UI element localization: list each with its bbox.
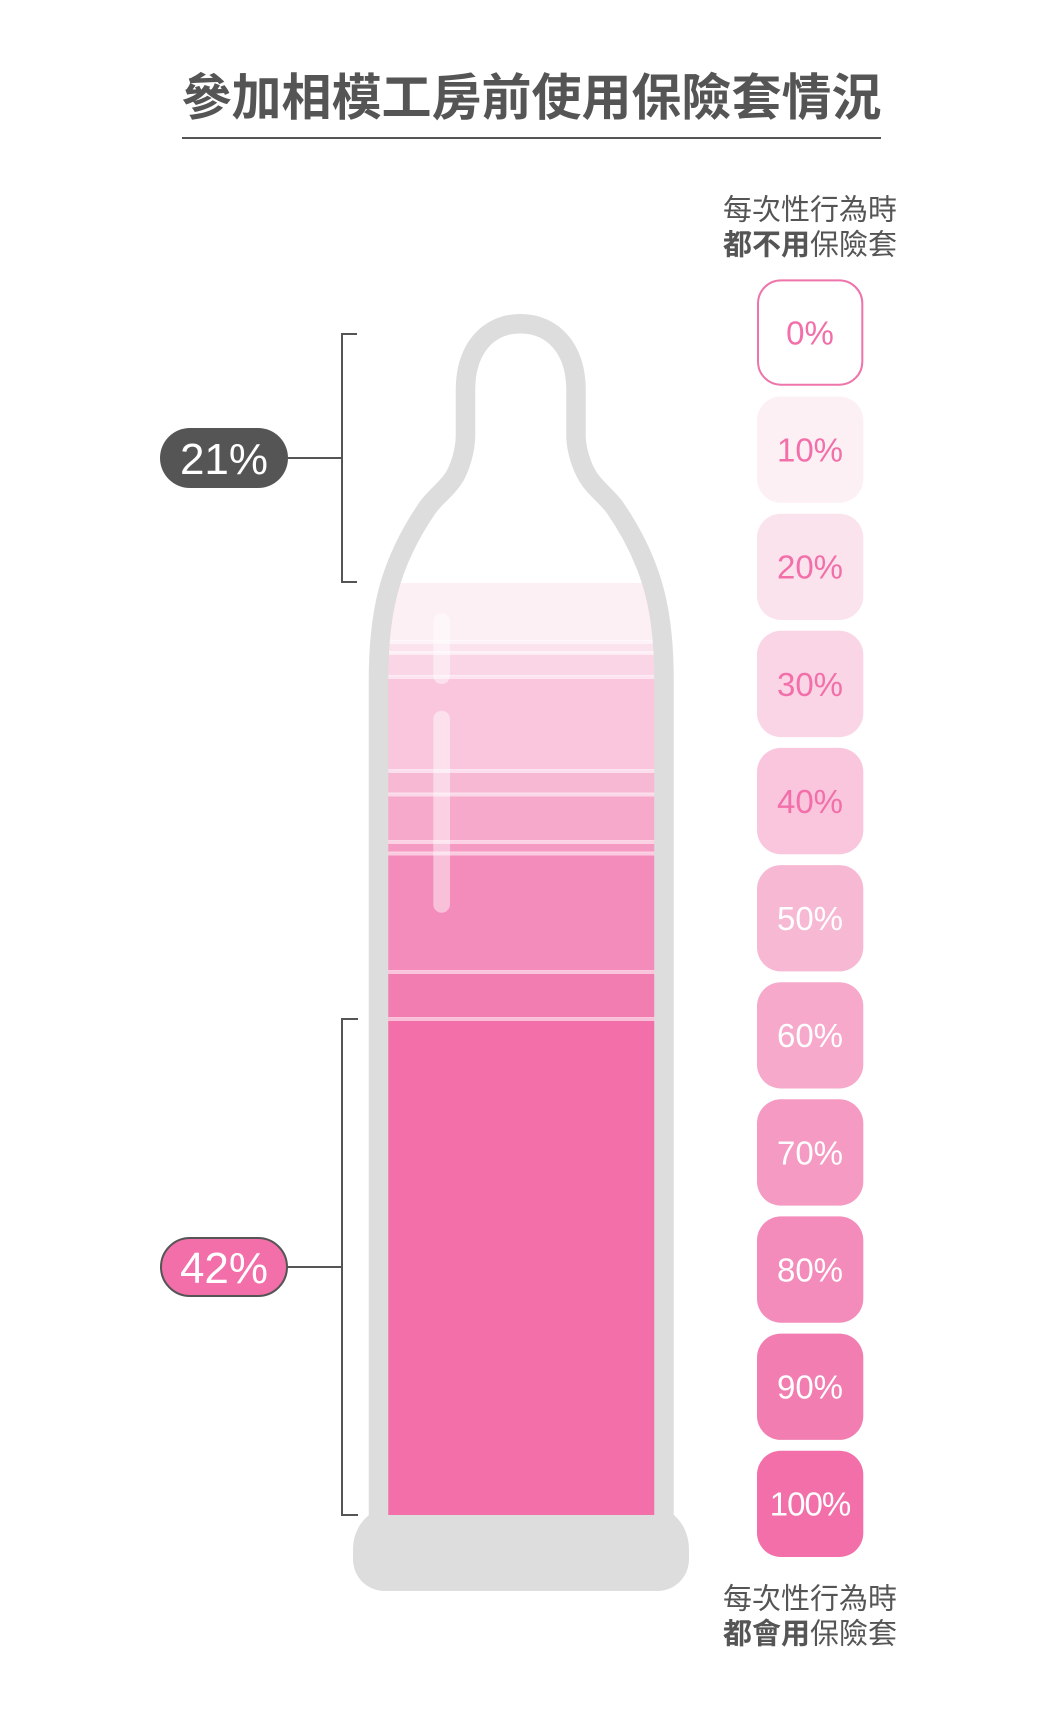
scale box 40%: 40% [777,783,843,820]
bottom axis label: 每次性行為時 [723,1584,897,1616]
scale box 50%: 50% [777,900,843,937]
condom chart [353,324,689,1591]
scale box 10%: 10% [777,432,843,468]
top axis label: 都不用保險套 [723,230,897,262]
scale box 0% [758,280,862,385]
scale box 80% [757,1216,863,1323]
scale box 0%: 0% [786,314,834,351]
top axis label: 每次性行為時 [723,194,897,226]
scale box 30% [757,631,863,737]
scale box 50% [757,865,863,971]
scale box 80%: 80% [777,1251,843,1288]
scale box 70% [757,1099,863,1206]
scale box 100%: 100% [770,1486,851,1523]
scale box 100% [757,1451,863,1557]
scale box 30%: 30% [777,666,843,703]
callout: 42 percent always use: 42% [180,1244,268,1293]
callout: 21 percent never use [160,334,357,582]
scale box 60%: 60% [777,1017,843,1054]
bottom axis label: 都會用保險套 [723,1618,897,1650]
scale box 10% [757,396,863,503]
scale box 70%: 70% [777,1134,843,1171]
scale box 60% [757,982,863,1088]
condom outline [378,324,664,1530]
percentage scale [757,280,863,1557]
stacked fill bands [387,583,657,1515]
highlight: lower [433,711,450,913]
title: 參加相模工房前使用保險套情況 [182,70,882,126]
callout: 21 percent never use: 21% [180,435,268,484]
scale box 90%: 90% [777,1369,843,1406]
scale box 90% [757,1334,863,1440]
callout: 42 percent always use [161,1019,358,1515]
scale box 20%: 20% [777,549,843,586]
highlight: upper [433,613,450,684]
scale box 40% [757,748,863,854]
condom base ring [353,1515,689,1591]
scale box 20% [757,514,863,620]
